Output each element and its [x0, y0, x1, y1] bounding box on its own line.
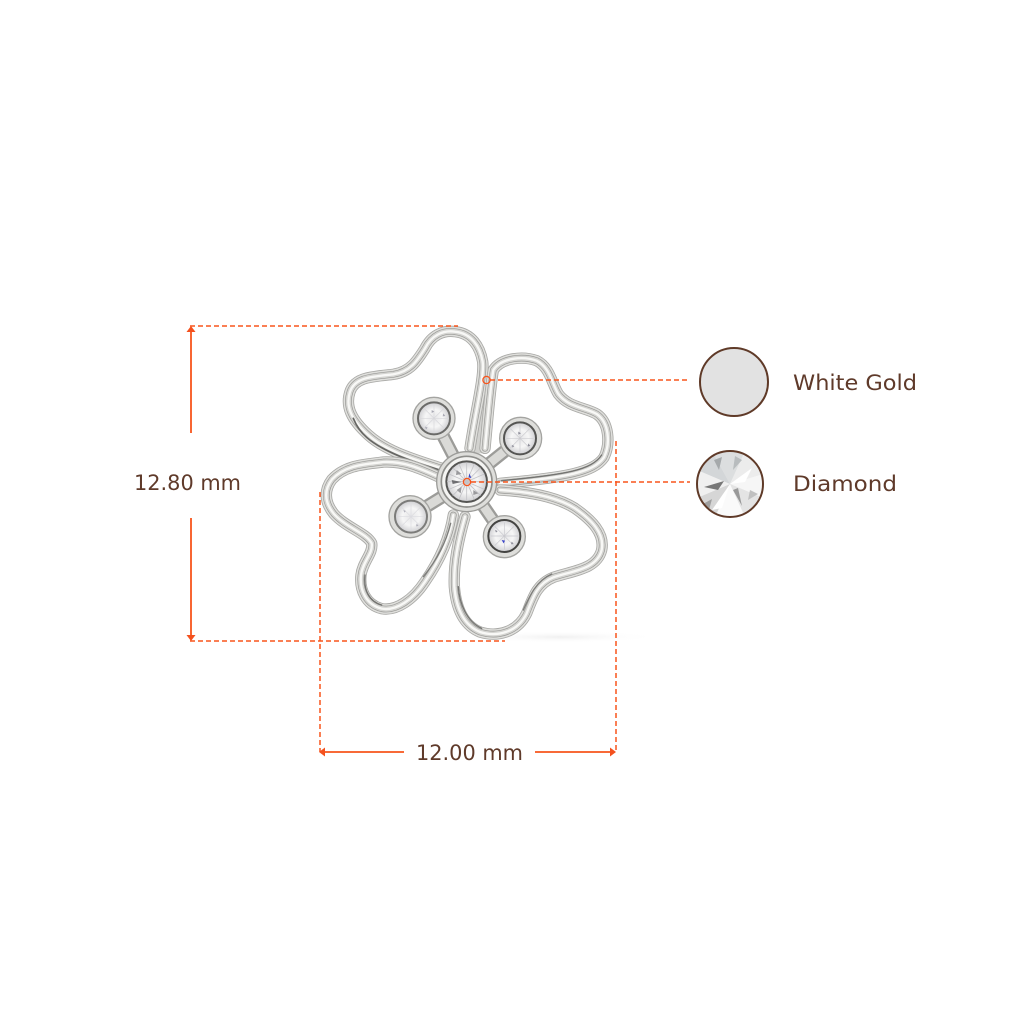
petal: bottom [454, 490, 602, 634]
leader: white gold [483, 376, 688, 384]
height arrow [186, 326, 196, 641]
height label: 12.80 mm [134, 471, 241, 496]
small stone: upper right [500, 417, 542, 459]
small stone: lower right [483, 516, 525, 558]
swatch: white gold [700, 348, 768, 416]
spokes [410, 418, 521, 537]
leader: diamond [463, 478, 690, 486]
swatch: diamond [697, 451, 763, 517]
ground shadow [460, 631, 660, 643]
petal: left [326, 462, 453, 609]
central stem [467, 370, 496, 453]
width arrow [319, 748, 616, 756]
small stone: lower left [389, 496, 431, 538]
petal: right [485, 358, 608, 483]
width label: 12.00 mm [416, 741, 523, 766]
label: white gold: White Gold [793, 371, 917, 396]
petal: top [348, 331, 483, 471]
earring: flower with diamonds [326, 331, 608, 634]
label: diamond: Diamond [793, 472, 897, 497]
small stone: upper left [413, 397, 455, 439]
centre stone [437, 452, 497, 512]
height dimension guides [190, 326, 505, 641]
width dimension guides [320, 441, 616, 752]
